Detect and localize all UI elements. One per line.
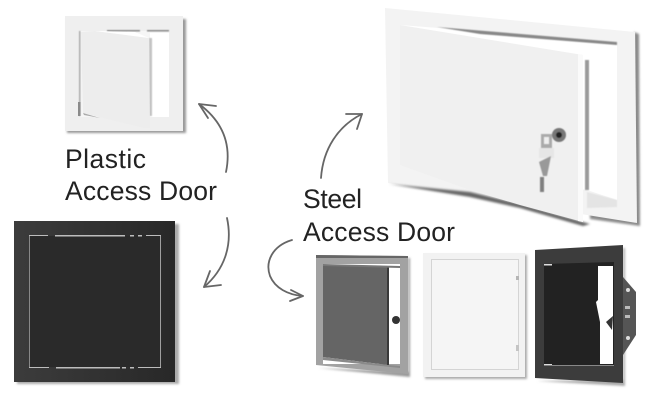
heading: plastic access door: Plastic (65, 144, 146, 174)
plastic door: black, closed (14, 221, 179, 384)
heading: plastic access door: Access Door (65, 176, 217, 206)
heading: steel access door (303, 184, 455, 247)
steel door: large white with key lock (385, 8, 640, 226)
arrow: steel label to door row (268, 240, 303, 301)
steel door: grey, open (316, 255, 410, 377)
heading: plastic access door (65, 144, 217, 206)
arrow: steel label to large white door (321, 114, 362, 178)
icon: lock and key (539, 128, 566, 192)
arrow: plastic door label to white door (199, 104, 228, 172)
heading: steel access door: Steel (303, 184, 362, 214)
steel door: black, open with bracket (535, 245, 636, 386)
steel door: white, closed (423, 253, 527, 379)
plastic door: white, open (65, 16, 186, 133)
heading: steel access door: Access Door (303, 217, 455, 247)
arrow: plastic door label to black door (204, 218, 229, 287)
